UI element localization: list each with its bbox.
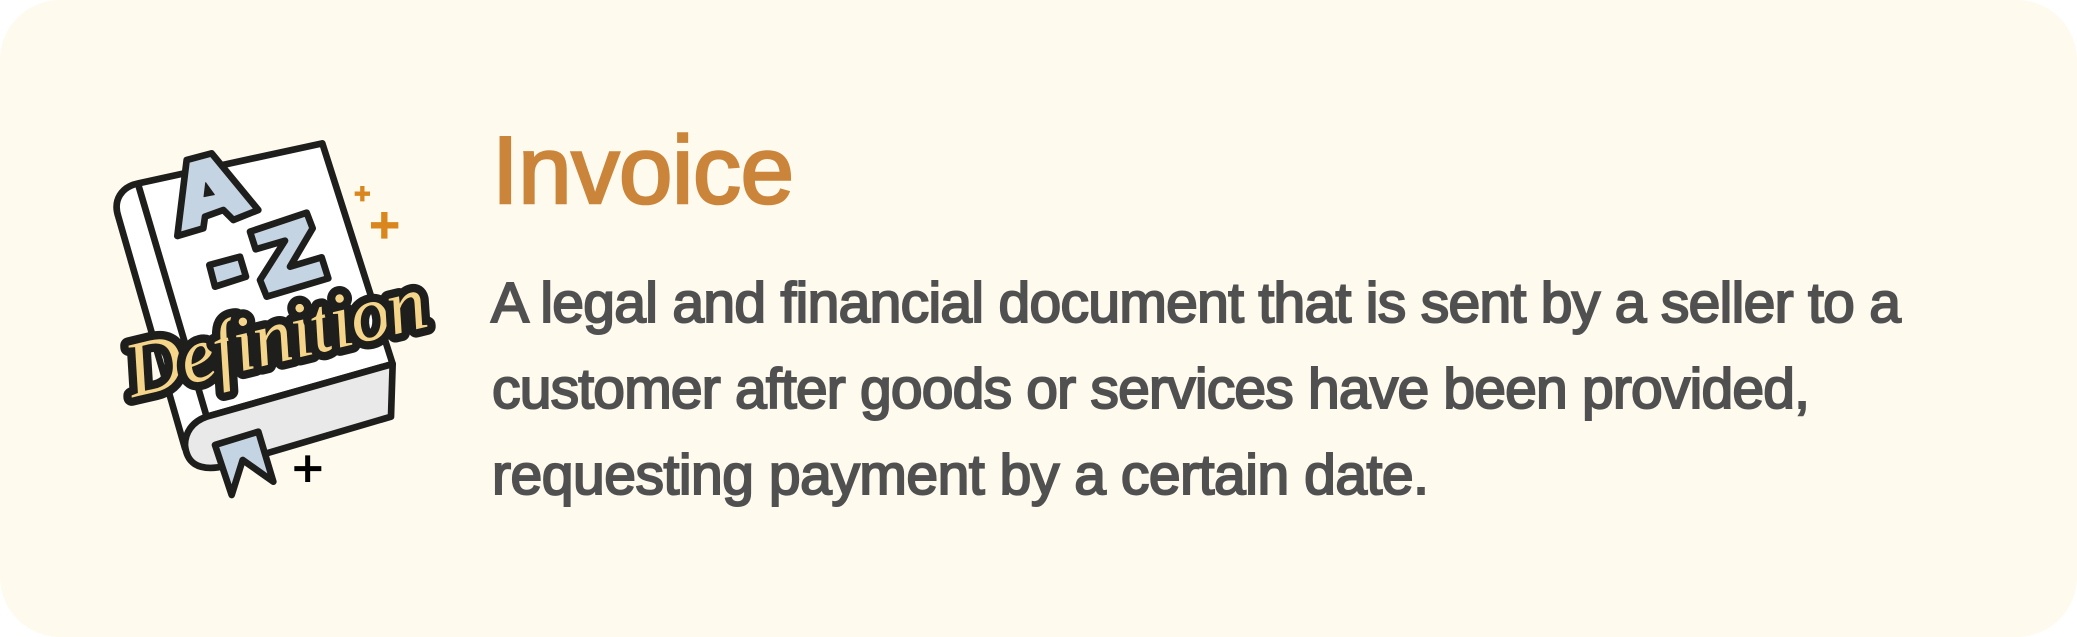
book spine line — [138, 185, 207, 417]
letter A counter — [204, 183, 214, 197]
definition text — [491, 271, 1901, 507]
book pages — [185, 364, 393, 468]
book cover — [117, 143, 393, 448]
letter A — [177, 153, 258, 236]
definition script label: Definition — [115, 258, 435, 414]
black plus — [294, 455, 321, 482]
small orange plus — [355, 186, 370, 201]
letter Z — [250, 213, 328, 297]
line 2: customer after goods or services have been provided, — [492, 357, 1810, 421]
large orange plus — [371, 212, 398, 239]
bookmark — [215, 432, 273, 495]
line 3: requesting payment by a certain date. — [492, 443, 1429, 507]
hyphen — [209, 257, 246, 287]
title: Invoice — [492, 117, 794, 224]
icon: definition book — [115, 143, 435, 495]
line 1: A legal and financial document that is sent by a seller to a — [491, 271, 1901, 335]
